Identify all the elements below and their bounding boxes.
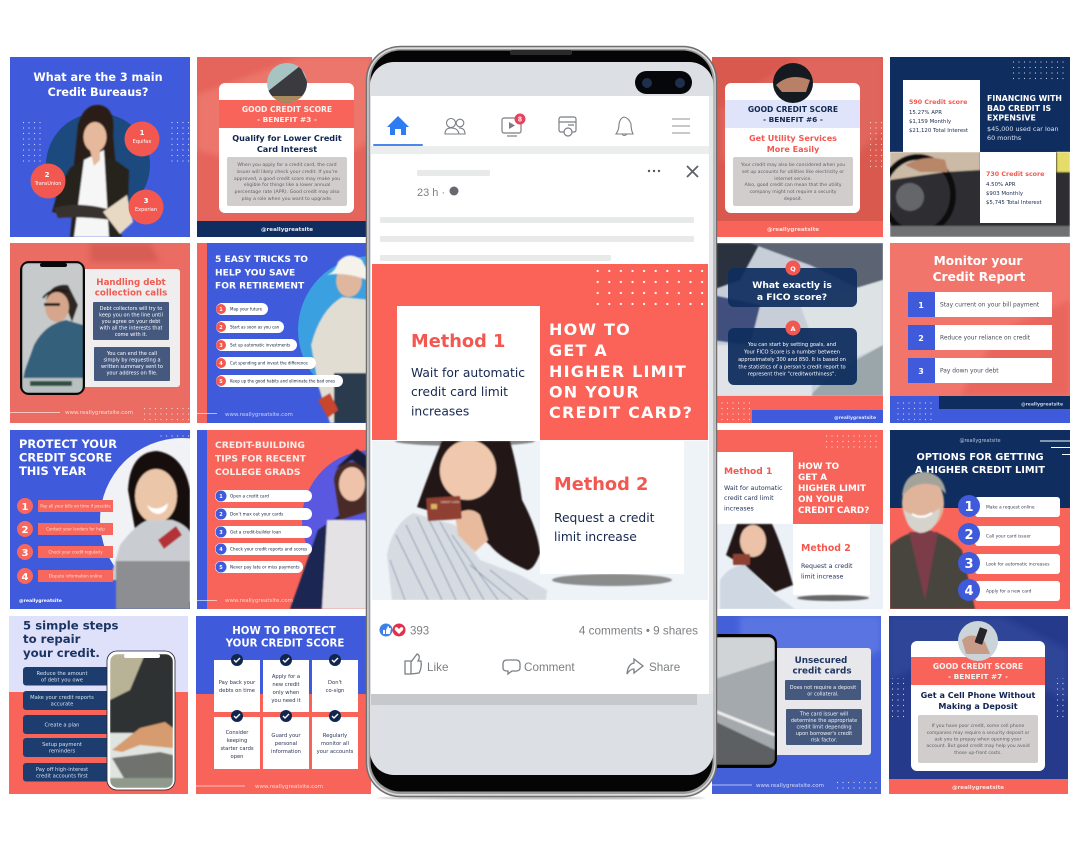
steps: 2 (964, 528, 974, 543)
heading (933, 254, 1026, 284)
photo: woman with card and laptop (110, 451, 190, 609)
method 1: increases (411, 404, 469, 418)
background photo (712, 243, 883, 396)
heading: HIGHER LIMIT (798, 484, 866, 494)
checklist grid: starter cards (220, 746, 254, 752)
post header: 23 h · (417, 187, 445, 199)
heading (915, 452, 1045, 476)
subheading: Get Utility Services (749, 133, 837, 143)
card: unsecured credit cards (708, 616, 881, 794)
list rows: 1 (918, 301, 924, 310)
photo: smiling older man (890, 472, 975, 609)
callouts: three bureaus: Experian (135, 207, 157, 213)
checklist grid: new credit (272, 682, 300, 688)
panel (770, 648, 871, 755)
photo: woman holding card: CREDIT CARD (440, 500, 460, 504)
white panel: 730 score (980, 152, 1056, 223)
heading: 5 simple steps (23, 618, 119, 632)
poster title: HIGHER LIMIT (549, 362, 687, 381)
steps: 3 (219, 343, 223, 349)
steps: Set up automatic investments (230, 342, 290, 348)
text block (733, 157, 853, 206)
heading: CREDIT CARD? (798, 506, 869, 516)
step bars: Reduce the amount (36, 671, 88, 677)
text block: Also, good credit can mean that the utility (744, 182, 842, 188)
website: www.reallygreatsite.com (255, 784, 323, 790)
icon: home (387, 116, 409, 135)
heading: GET A (798, 473, 827, 483)
step bars: credit accounts first (36, 774, 88, 780)
handle: @reallygreatsite (1021, 402, 1063, 408)
text block: approved, a good credit score may make you (234, 176, 340, 182)
checklist grid: Don't (328, 680, 342, 686)
panel: The card issuer will (799, 712, 848, 718)
steps: 3 (22, 548, 29, 559)
card: benefit 7 (889, 616, 1068, 794)
reactions row: 4 comments • 9 shares (579, 624, 698, 638)
steps: 2 (219, 512, 223, 518)
poster title: ON YOUR (549, 382, 640, 402)
step bars: Create a plan (45, 722, 79, 728)
panel: you agree on your debt (102, 319, 160, 325)
steps: Make a request online (986, 504, 1035, 510)
steps: 1 (22, 502, 29, 513)
steps: Cut spending and invest the difference (230, 360, 308, 366)
heading: 5 EASY TRICKS TO (215, 255, 308, 265)
list rows: Reduce your reliance on credit (940, 336, 1031, 342)
phone photo: man with headset (20, 261, 85, 395)
callouts: three bureaus: 3 (144, 197, 149, 205)
panel: credit cards (792, 666, 852, 676)
card: credit-building tips (197, 430, 366, 609)
steps: Contact your lenders for help (46, 526, 105, 532)
checklist grid: only when (273, 690, 299, 696)
handle: @reallygreatsite (767, 227, 819, 233)
card: options for getting a higher credit limit (890, 430, 1070, 609)
text block (227, 157, 347, 206)
heading: BAD CREDIT IS (987, 104, 1052, 113)
left text: Wait for automatic (724, 485, 783, 492)
left text (724, 467, 783, 512)
text block: internet service. (774, 176, 812, 182)
check icons (231, 654, 341, 722)
panel: come with it. (115, 332, 148, 338)
left text: credit card limit (724, 495, 774, 502)
text block: deposit. (784, 196, 802, 202)
heading: YOUR CREDIT SCORE (225, 638, 344, 650)
question box: What exactly is (752, 280, 832, 291)
handle: @reallygreatsite (261, 227, 313, 233)
handle: @reallygreatsite (19, 598, 62, 604)
method 1 (411, 331, 525, 418)
heading: benefit (242, 106, 332, 122)
steps: 4 (22, 572, 29, 583)
heading: benefit (748, 106, 838, 122)
panel: risk factor. (811, 738, 838, 744)
right text: Request a credit (801, 563, 853, 570)
heading (798, 462, 869, 516)
heading (987, 94, 1062, 122)
steps (216, 303, 343, 387)
text block: issuer will likely check your credit. If you're (236, 169, 338, 175)
panel: credit limit depending (796, 724, 852, 730)
right text: limit increase (801, 574, 844, 580)
panel: keep you on the line until (99, 312, 163, 318)
white panel: 730 score: $5,745 Total Interest (986, 200, 1042, 206)
smartphone mockup (366, 46, 716, 800)
steps (958, 495, 1060, 601)
steps: Don't max out your cards (230, 512, 283, 516)
step bars: reminders (49, 748, 75, 754)
steps: 3 (219, 530, 223, 536)
heading: PROTECT YOUR (19, 437, 117, 451)
icon: bell (616, 117, 633, 136)
post header (417, 166, 698, 199)
reactions row: 393 (410, 626, 429, 638)
card: how to protect your credit score (196, 616, 371, 794)
subheading (749, 135, 837, 154)
website: www.reallygreatsite.com (756, 783, 824, 789)
heading: ON YOUR (798, 495, 844, 505)
text block: percentage rate (APR). Good credit may also (234, 189, 340, 195)
steps: 4 (219, 547, 223, 553)
heading: Credit Bureaus? (48, 86, 148, 99)
checklist grid: co-sign (326, 688, 344, 694)
heading: HOW TO (798, 462, 840, 472)
steps: 5 (219, 379, 223, 385)
subheading: Making a Deposit (938, 701, 1018, 711)
icon: comment (503, 660, 520, 674)
white panel: 590 score: 15.27% APR (909, 110, 942, 116)
heading (225, 626, 344, 650)
step bars: Pay off high-interest (36, 767, 88, 773)
website: www.reallygreatsite.com (225, 412, 293, 418)
panel (80, 269, 180, 387)
heading: Credit Report (933, 270, 1026, 284)
checklist grid: keeping (227, 738, 247, 744)
action bar (405, 654, 680, 674)
steps: Keep up the good habits and eliminate the bad ones (230, 378, 335, 384)
answer box (728, 320, 857, 385)
method 2 panel: Method 2 (554, 474, 648, 495)
method 2 panel: Request a credit (554, 511, 655, 525)
heading: CREDIT-BUILDING (215, 440, 305, 451)
list rows: 2 (918, 334, 924, 343)
poster title: GET A (549, 341, 608, 360)
method 2 panel: limit increase (554, 530, 637, 544)
text block (918, 715, 1038, 763)
card: 5 simple steps (9, 616, 188, 794)
method 1: Method 1 (411, 331, 505, 352)
steps: Look for automatic increases (986, 562, 1050, 568)
subheading (921, 690, 1035, 711)
white panel: 590 score (903, 80, 980, 152)
action bar: Share (649, 661, 680, 674)
text block: ask you to prepay when opening your (935, 736, 1022, 742)
icon: share (627, 659, 643, 674)
heading: benefit: GOOD CREDIT SCORE (933, 662, 1023, 671)
list rows (908, 292, 1052, 383)
loan details: $45,000 used car loan (987, 125, 1059, 133)
method 2 panel (540, 441, 684, 586)
steps: Call your card issuer (986, 534, 1031, 540)
card: financing with bad credit (883, 57, 1070, 237)
panel: determine the appropriate (791, 718, 857, 724)
steps: Start as soon as you can (230, 324, 280, 330)
steps: 3 (964, 557, 974, 572)
white panel: 730 score: 4.50% APR (986, 182, 1016, 188)
subheading (232, 135, 342, 152)
white panel: 730 score: 730 Credit score (986, 171, 1044, 178)
heading: EXPENSIVE (987, 114, 1036, 122)
action bar: Comment (524, 661, 575, 674)
card: benefit 6 (712, 57, 883, 237)
panel: Unsecured (795, 656, 847, 666)
steps: 5 (219, 565, 223, 571)
steps: Open a credit card (230, 494, 269, 498)
left text: increases (724, 506, 754, 512)
handle: @reallygreatsite (834, 415, 876, 421)
heading: OPTIONS FOR GETTING (916, 452, 1044, 463)
steps: Dispute information online (49, 574, 103, 578)
step bars: Setup payment (42, 742, 82, 748)
step bars (23, 667, 113, 782)
heading: A HIGHER CREDIT LIMIT (915, 465, 1045, 476)
checklist grid: open (231, 754, 243, 760)
checklist grid: Pay back your (219, 680, 256, 686)
heading: benefit: GOOD CREDIT SCORE (242, 105, 332, 114)
card: how to get a higher limit (small) (712, 430, 883, 609)
answer box: represent their "creditworthiness". (748, 372, 836, 378)
heading: benefit: - BENEFIT #6 - (763, 115, 823, 124)
answer box: A (790, 325, 796, 333)
photo: businesswoman (52, 105, 133, 237)
phone photo: calculator (107, 651, 175, 790)
steps: 2 (22, 525, 29, 536)
card: protect your credit score (10, 430, 190, 609)
panel: simply by requesting a (103, 358, 161, 364)
poster title (549, 320, 693, 422)
checklist grid: your accounts (317, 749, 354, 755)
panel: your address on file. (106, 370, 158, 376)
checklist grid (214, 660, 358, 769)
card: monitor your credit report (890, 243, 1070, 423)
heading: benefit: - BENEFIT #7 - (948, 672, 1008, 681)
right text: Method 2 (801, 543, 851, 554)
steps: Apply for a new card (986, 588, 1032, 594)
panel: Debt collectors will try to (100, 306, 162, 312)
photo: hands on keyboard (773, 63, 813, 103)
subheading: Get a Cell Phone Without (921, 690, 1035, 700)
steps: 4 (964, 584, 974, 599)
photo: graduate (290, 449, 372, 609)
heading: CREDIT SCORE (19, 450, 112, 464)
right text (801, 543, 853, 580)
steps: Check your credit regularly (48, 550, 103, 554)
heading: TIPS FOR RECENT (215, 454, 307, 464)
steps (215, 490, 312, 573)
heading: COLLEGE GRADS (215, 467, 301, 478)
camera (635, 71, 692, 94)
heading (19, 440, 117, 475)
icon: video with badge (502, 114, 526, 136)
callouts: three bureaus: 2 (45, 171, 50, 179)
question box: a FICO score? (757, 292, 827, 303)
icon: like (405, 654, 421, 674)
loan details: 60 months (987, 134, 1022, 142)
white panel: 590 score: $21,120 Total Interest (909, 128, 968, 134)
heading (216, 256, 308, 288)
callouts: three bureaus: 1 (140, 129, 145, 137)
steps: 1 (219, 494, 223, 500)
checklist grid: debts on time (219, 688, 255, 694)
steps (17, 498, 113, 584)
checklist grid: Guard your (271, 733, 301, 739)
step bars: accurate (51, 702, 73, 708)
action bar: Like (427, 661, 448, 674)
answer box: You can start by setting goals, and (747, 342, 836, 348)
photo: older man in hat (311, 255, 372, 423)
heading: THIS YEAR (19, 464, 87, 478)
list rows: 3 (918, 367, 924, 376)
step bars: Make your credit reports (30, 695, 94, 701)
photo: cell phone in hands (958, 621, 998, 661)
card: FICO Q and A (712, 243, 883, 423)
heading: FOR RETIREMENT (215, 282, 305, 292)
text block: When you apply for a credit card, the card (237, 162, 337, 168)
loan details (987, 125, 1059, 142)
handle: @reallygreatsite (959, 438, 1001, 444)
subheading: More Easily (767, 144, 820, 154)
white panel: 590 score: $1,159 Monthly (909, 119, 952, 125)
text block: If you have poor credit, some cell phone (932, 723, 1025, 729)
website: www.reallygreatsite.com (225, 598, 293, 604)
checklist grid: information (271, 749, 301, 755)
card: handling debt collection calls (10, 243, 190, 423)
heading (23, 618, 119, 660)
photo: steering wheel (883, 152, 1070, 237)
steps: 2 (219, 325, 223, 331)
heading (215, 442, 306, 475)
subheading: Card Interest (257, 144, 317, 154)
question box: Q (790, 265, 796, 273)
text block: company might not require a security (750, 189, 837, 195)
heading: HELP YOU SAVE (215, 268, 295, 278)
steps: 1 (219, 307, 223, 313)
photo: woman with card (720, 524, 795, 609)
post image: how to get a higher limit (372, 264, 708, 600)
icon: marketplace (559, 117, 576, 136)
checklist grid: personal (275, 741, 297, 747)
panel: or collateral. (807, 692, 839, 698)
text block: eligible for things like a lower annual (244, 182, 330, 188)
panel: with all the interests that (100, 326, 163, 332)
panel: written summary sent to (101, 364, 163, 370)
icon: friends (445, 118, 465, 134)
phone photo: credit cards (708, 634, 777, 768)
website: www.reallygreatsite.com (65, 410, 133, 416)
question box (728, 260, 857, 307)
heading: benefit (933, 662, 1023, 681)
card: benefit 3 (197, 57, 372, 237)
answer box: approximately 300 and 850. It is based on (738, 357, 846, 363)
panel: Does not require a deposit (790, 685, 856, 691)
answer box: Your FICO Score is a number between (743, 350, 840, 356)
card: 5 easy tricks (197, 243, 366, 423)
steps: Check your credit reports and scores (230, 546, 307, 552)
heading: HOW TO PROTECT (232, 626, 336, 637)
text block: account. But good credit may help you avoid (926, 743, 1030, 749)
checklist grid: monitor all (321, 741, 349, 747)
steps: 1 (964, 500, 974, 515)
list rows: Stay current on your bill payment (940, 302, 1040, 308)
reactions row (380, 624, 698, 638)
heading: to repair (23, 632, 81, 646)
panel: collection calls (95, 288, 167, 298)
photo: credit card (267, 63, 307, 103)
steps: 4 (219, 361, 223, 367)
panel: You can end the call (106, 351, 157, 357)
text block: play a role when you want to upgrade. (242, 196, 332, 202)
placeholder post text (380, 217, 694, 261)
text block: Your credit may also be considered when you (740, 162, 845, 168)
checklist grid: Consider (226, 730, 249, 736)
steps: Never pay late or miss payments (230, 564, 300, 570)
step bars: of debt you owe (41, 678, 83, 684)
heading: benefit: GOOD CREDIT SCORE (748, 105, 838, 114)
heading: Monitor your (934, 254, 1022, 268)
text block: those up-front costs. (954, 750, 1002, 756)
steps: Get a credit-builder loan (230, 530, 281, 534)
checklist grid: Apply for a (272, 674, 300, 680)
checklist grid: Regularly (323, 733, 347, 739)
white panel: 730 score: $903 Monthly (986, 191, 1024, 197)
heading (34, 72, 162, 96)
heading: your credit. (23, 646, 100, 660)
checklist grid: you need it (271, 698, 301, 704)
handle: @reallygreatsite (952, 785, 1004, 791)
photo: woman holding card (387, 435, 547, 600)
icon: menu (672, 119, 690, 133)
heading: FINANCING WITH (987, 94, 1062, 103)
subheading: Qualify for Lower Credit (232, 133, 342, 143)
white panel: 590 score: 590 Credit score (909, 99, 967, 106)
method 1: credit card limit (411, 385, 508, 399)
callouts: three bureaus: TransUnion (34, 181, 61, 187)
icon: video with badge: 8 (518, 116, 522, 124)
steps: Map your future (230, 306, 263, 312)
callouts: three bureaus: Equifax (133, 139, 151, 145)
text block: companies may require a security deposit or (927, 730, 1030, 736)
steps: Pay all your bills on time if possible (40, 504, 111, 508)
panel: upon borrower's credit (796, 731, 852, 737)
heading: What are the 3 main (33, 71, 163, 84)
left text: Method 1 (724, 467, 772, 477)
card: what are the 3 main credit bureaus (10, 57, 190, 237)
answer box: the statistics of a person's credit report to (738, 364, 846, 370)
poster title: CREDIT CARD? (549, 403, 693, 422)
heading: benefit: - BENEFIT #3 - (257, 115, 317, 124)
text block: set up accounts for utilities like electricity or (742, 169, 844, 175)
list rows: Pay down your debt (940, 368, 999, 374)
method 1: Wait for automatic (411, 366, 525, 380)
callouts: three bureaus (30, 122, 164, 224)
poster title: HOW TO (549, 320, 631, 339)
nav bar icons (371, 114, 709, 154)
panel: Handling debt (96, 278, 166, 288)
